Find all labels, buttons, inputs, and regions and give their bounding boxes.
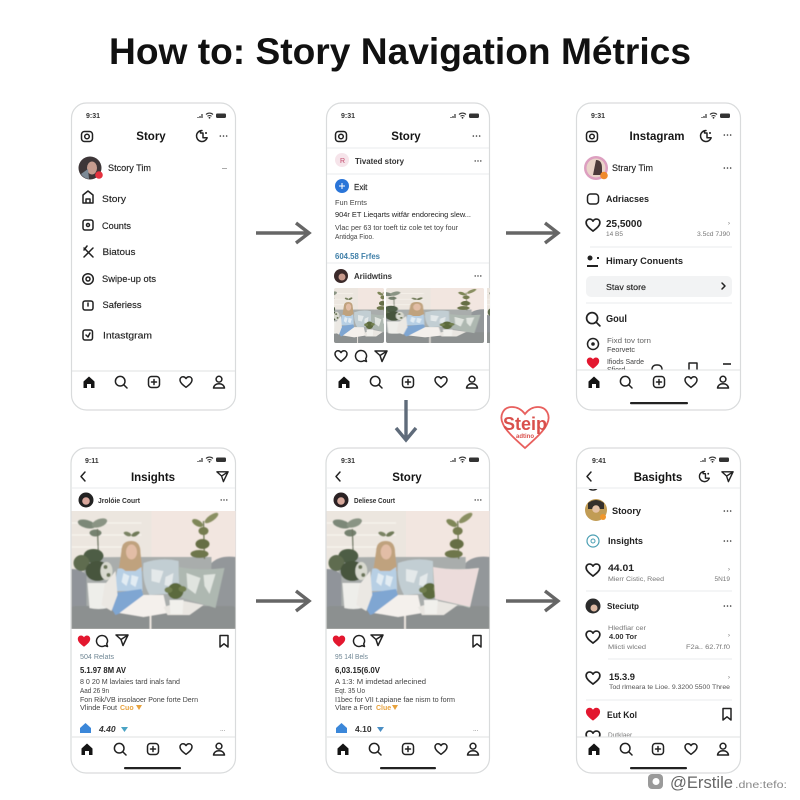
bottom nav bbox=[84, 376, 224, 388]
caption: Fon Rik/VB insolaoer Pone forte Dern bbox=[80, 697, 198, 704]
phone 5: story post bbox=[326, 448, 490, 773]
metric row 4.00: F2a.. 62.7f.f0 bbox=[686, 644, 730, 651]
stats row: 4.10 bbox=[355, 724, 372, 734]
metric rows: 3.5cd 7J90 bbox=[697, 231, 730, 238]
author row: Jrolóie Court bbox=[98, 496, 140, 505]
metric row 44.01: 5N19 bbox=[714, 576, 730, 583]
bottom nav bbox=[82, 743, 224, 755]
metric row 44.01: 44.01 bbox=[608, 563, 635, 574]
steciutp row bbox=[586, 598, 731, 614]
caption bbox=[335, 654, 455, 712]
caption: 8 0 20 M lavlaies tard inals fand bbox=[80, 679, 180, 686]
phone 4: insights post: 9:11 bbox=[85, 458, 99, 465]
phone 2: story feed bbox=[326, 102, 490, 411]
caption: 95 14l Bels bbox=[335, 654, 368, 661]
stats row: 4.40 bbox=[98, 724, 116, 734]
metric rows bbox=[586, 194, 730, 238]
search section: Feorvetc bbox=[607, 347, 636, 354]
phone 3: instagram metrics bbox=[576, 103, 740, 410]
caption: Vlare a Fort bbox=[335, 705, 372, 712]
phone 4: insights post: Insights bbox=[131, 472, 175, 484]
search section bbox=[587, 313, 731, 375]
photo carousel bbox=[334, 288, 490, 343]
metric row 4.00 bbox=[586, 625, 730, 651]
steciutp row: Steciutp bbox=[607, 601, 639, 611]
story store button bbox=[586, 276, 732, 297]
story row bbox=[585, 499, 731, 521]
metric row 44.01: Mierr Cistic, Reed bbox=[608, 576, 664, 583]
watermark bbox=[648, 773, 787, 792]
phone 6: basights list: 9:41 bbox=[592, 458, 606, 465]
metric row 4.00: Hledfiar cer bbox=[608, 625, 647, 632]
phone 5: story post: 9:31 bbox=[341, 458, 355, 465]
insights row: Insights bbox=[608, 536, 643, 547]
search section: Goul bbox=[606, 314, 627, 325]
profile row bbox=[584, 156, 731, 180]
post text: Antidga Fioo. bbox=[335, 234, 374, 241]
post actions bbox=[335, 350, 387, 362]
post text: Exit bbox=[354, 183, 368, 192]
metric row 44.01 bbox=[586, 563, 730, 583]
stats row bbox=[336, 723, 479, 734]
shared story row: Tivated story bbox=[355, 156, 404, 166]
phone 3: instagram metrics: Instagram bbox=[630, 131, 684, 143]
bottom nav bbox=[338, 743, 478, 755]
phone 6: basights list bbox=[576, 448, 740, 773]
saved row: Dutklaer bbox=[608, 732, 633, 739]
stats row: ... bbox=[220, 726, 226, 733]
phone 3: instagram metrics: 9:31 bbox=[591, 113, 605, 120]
post text: 904r ET Lieqarts witfär endorecing slew... bbox=[335, 210, 471, 219]
story row: Stoory bbox=[612, 506, 642, 517]
metric row 15.3.9: Tod rlmeara te Lioe. 9.3200 5500 Three bbox=[609, 684, 730, 691]
menu list: Swipe-up ots bbox=[102, 274, 156, 285]
menu list: Intastgram bbox=[103, 330, 152, 342]
arrow: phone 1 to 2 bbox=[256, 223, 309, 243]
metric row 4.00: 4.00 Tor bbox=[609, 632, 637, 641]
story store button: Stav store bbox=[606, 282, 646, 292]
watermark: @Erstile bbox=[670, 773, 733, 792]
heart stamp: Steip bbox=[503, 414, 547, 434]
phone 5: story post: Story bbox=[392, 472, 422, 484]
metric row 15.3.9: › bbox=[728, 674, 730, 681]
caption bbox=[80, 654, 198, 712]
profile row: Strary Tim bbox=[612, 163, 653, 174]
metric row 15.3.9 bbox=[586, 672, 730, 691]
menu list: Story bbox=[102, 194, 126, 205]
caption: Eqt. 35 Uo bbox=[335, 688, 365, 695]
caption: Vlinde Fout bbox=[80, 705, 117, 712]
phone 1: story menu bbox=[72, 103, 236, 410]
shared story row: R bbox=[340, 158, 345, 165]
post actions bbox=[333, 635, 481, 647]
profile row: Stcory Tim bbox=[108, 163, 151, 174]
metric row 4.00: Mlicti wlced bbox=[608, 644, 646, 651]
metric rows: › bbox=[728, 220, 730, 227]
caption: A 1:3: M imdetad arlecined bbox=[335, 679, 426, 686]
arrow: phone 5 to 6 bbox=[506, 591, 558, 611]
author row bbox=[334, 269, 482, 283]
heart stamp: adtino bbox=[516, 434, 534, 440]
arrow: phone 2 down to 5 bbox=[396, 400, 416, 440]
metric rows: 14 B5 bbox=[606, 231, 623, 238]
caption: I1bec for VII t.apiane fae nism to form bbox=[335, 697, 455, 704]
phone 6: basights list: Basights bbox=[634, 472, 682, 484]
search section: Fixd tov torn bbox=[607, 338, 651, 345]
profile row bbox=[78, 156, 227, 180]
bottom nav bbox=[588, 376, 728, 388]
menu list: Biatous bbox=[102, 247, 136, 258]
author row bbox=[78, 492, 228, 508]
caption: Aad 26 9n bbox=[80, 688, 109, 695]
search section: Ifiods Sarde bbox=[607, 359, 644, 366]
photo: woman on sofa with pink pillow bbox=[326, 511, 490, 629]
metric rows: 25,5000 bbox=[606, 219, 642, 230]
metric row 15.3.9: 15.3.9 bbox=[609, 672, 635, 683]
search section: Sfiord bbox=[607, 367, 625, 374]
post text: Fun Ernts bbox=[335, 200, 368, 207]
post actions bbox=[78, 635, 228, 647]
phone 4: insights post bbox=[71, 448, 236, 773]
bottom nav bbox=[588, 743, 728, 755]
metric row 4.00: › bbox=[728, 632, 730, 639]
post text: 604.58 Frfes bbox=[335, 252, 381, 261]
shared story row bbox=[335, 153, 482, 167]
author row bbox=[334, 492, 482, 508]
caption: 6,03.15(6.0V bbox=[335, 666, 381, 675]
phone 1: story menu: 9:31 bbox=[86, 113, 100, 120]
watermark: .dne:tefo: bbox=[735, 780, 787, 791]
photo: woman on sofa bbox=[72, 511, 236, 629]
arrow: phone 4 to 5 bbox=[256, 591, 309, 611]
primary contents: Himary Conuents bbox=[606, 256, 683, 267]
caption: Cuo bbox=[120, 705, 134, 712]
stats row: ... bbox=[473, 726, 479, 733]
caption: 504 Relats bbox=[80, 654, 115, 661]
post text: Vlac per 63 tor toeft tiz cole tet toy four bbox=[335, 225, 459, 232]
menu list bbox=[83, 191, 156, 342]
phone 2: story feed: Story bbox=[391, 131, 421, 143]
caption: 5.1.97 8M AV bbox=[80, 666, 127, 675]
menu list: Saferiess bbox=[102, 300, 142, 311]
phone 1: story menu: Story bbox=[136, 131, 166, 143]
caption: Clue bbox=[376, 705, 391, 712]
saved row bbox=[585, 708, 732, 736]
phone 2: story feed: 9:31 bbox=[341, 113, 355, 120]
stats row bbox=[80, 723, 226, 734]
post text bbox=[335, 179, 471, 261]
metric rows: Adriacses bbox=[606, 194, 649, 205]
menu list: Counts bbox=[102, 221, 131, 232]
author row: Ariidwtins bbox=[354, 271, 392, 281]
heart stamp bbox=[501, 407, 549, 448]
arrow: phone 2 to 3 bbox=[506, 223, 558, 243]
bottom nav bbox=[338, 376, 478, 388]
metric row 44.01: › bbox=[728, 566, 730, 573]
title: How to: Story Navigation Métrics bbox=[109, 31, 691, 72]
saved row: Eut Kol bbox=[607, 710, 637, 721]
author row: Deliese Court bbox=[354, 496, 395, 505]
insights row bbox=[587, 535, 731, 547]
